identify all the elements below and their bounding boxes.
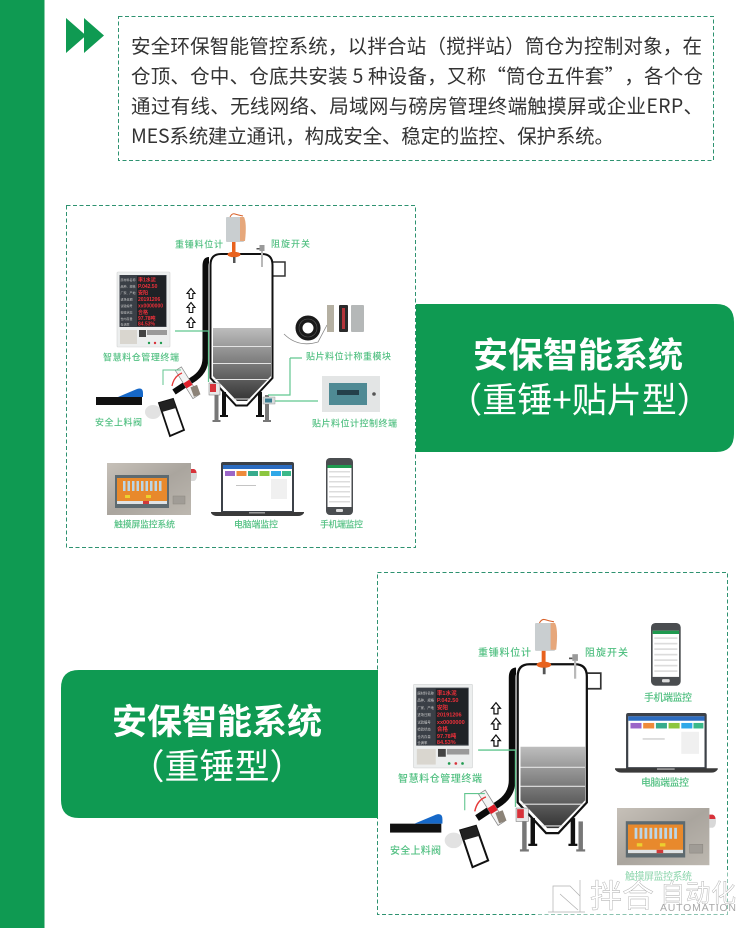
- laptop: [211, 462, 304, 516]
- device labels: 贴片料位计称重模块: [306, 350, 391, 362]
- device labels: [390, 646, 692, 883]
- watermark wordmark right: 自动化: [660, 880, 736, 908]
- device labels: 手机端监控: [320, 518, 363, 530]
- laptop: [615, 713, 718, 773]
- card: hammer type: [61, 670, 378, 818]
- touch screen: [107, 463, 197, 515]
- card heading: 安保智能系统: [473, 328, 683, 378]
- device labels: 手机端监控: [644, 691, 692, 704]
- device labels: 触摸屏监控系统: [114, 518, 175, 530]
- phone: [651, 623, 681, 686]
- card subheading: （重锤型）: [129, 739, 305, 790]
- panel: hammer type diagram: [378, 572, 728, 914]
- card heading: 安保智能系统: [112, 694, 322, 745]
- green sidebar: [0, 0, 44, 928]
- watermark: [535, 872, 738, 915]
- icon: double arrow: [66, 18, 104, 53]
- device labels: 智慧料仓管理终端: [103, 352, 179, 362]
- intro text: 安全环保智能管控系统，以拌合站（搅拌站）筒仓为控制对象，在: [131, 30, 702, 59]
- patch level control terminal: [263, 358, 380, 412]
- intro text: MES系统建立通讯，构成安全、稳定的监控、保护系统。: [131, 120, 614, 149]
- watermark wordmark: 拌合: [590, 878, 654, 914]
- weighing module: [284, 305, 364, 344]
- intro text: 通过有线、无线网络、局域网与磅房管理终端触摸屏或企业ERP、: [131, 90, 703, 119]
- card: hammer + patch type: [416, 304, 734, 452]
- device labels: 电脑端监控: [234, 518, 278, 530]
- intro text: 仓顶、仓中、仓底共安装 5 种设备，又称“筒仓五件套”，各个仓: [131, 60, 703, 89]
- panel: hammer + patch type diagram: [66, 206, 416, 548]
- device labels: 智慧料仓管理终端: [398, 772, 482, 785]
- phone: [326, 458, 353, 515]
- device labels: 重锤料位计: [175, 238, 223, 250]
- watermark english: AUTOMATION: [660, 902, 736, 914]
- card subheading: （重锤+贴片型）: [447, 372, 712, 424]
- silo with terminal and valve: [390, 619, 601, 867]
- device labels: 电脑端监控: [641, 776, 689, 789]
- intro text: [131, 30, 703, 149]
- silo with terminal and valve: [96, 214, 285, 436]
- device labels: 重锤料位计: [478, 646, 531, 659]
- device labels: 阻旋开关: [585, 646, 628, 659]
- touch screen: [617, 808, 716, 865]
- device labels: 贴片料位计控制终端: [312, 418, 397, 428]
- device labels: 阻旋开关: [271, 238, 310, 249]
- watermark logo: [548, 880, 585, 912]
- intro text box: [118, 16, 714, 160]
- device labels: 安全上料阀: [95, 416, 142, 428]
- device labels: [95, 238, 397, 530]
- device labels: 安全上料阀: [390, 844, 441, 857]
- device labels: 触摸屏监控系统: [625, 870, 692, 883]
